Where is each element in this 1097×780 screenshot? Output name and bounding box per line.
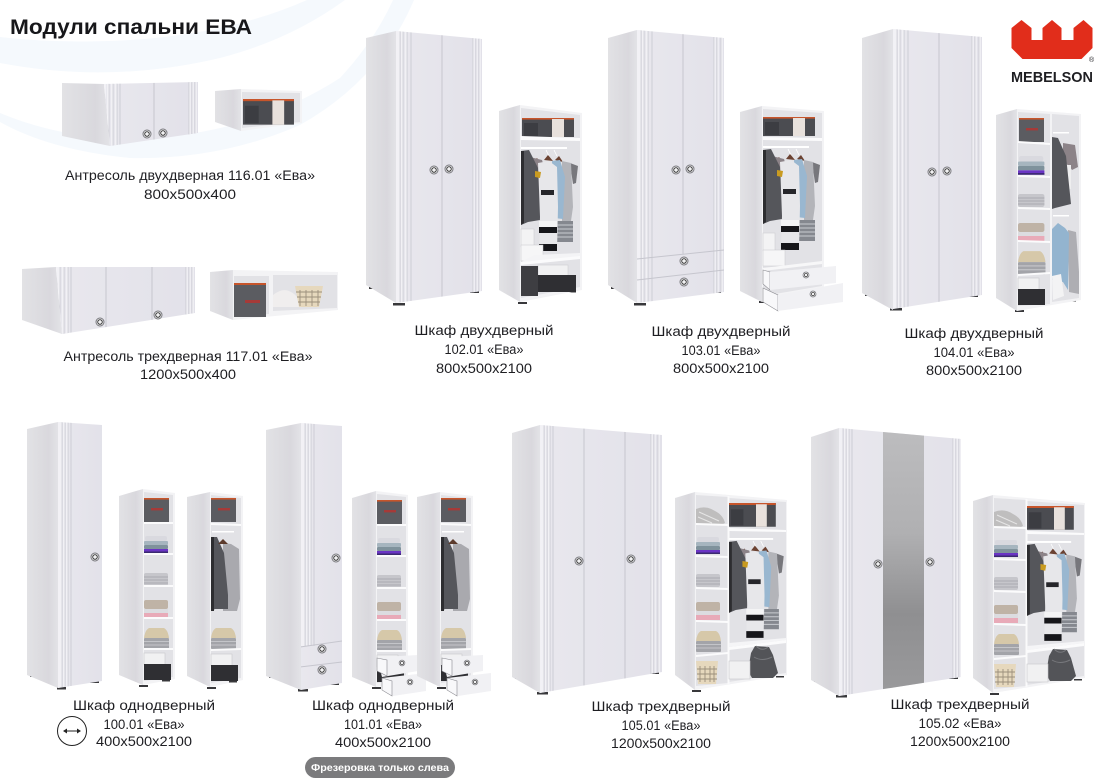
caption 105.02: 105.02 «Ева» xyxy=(918,716,1002,731)
caption 103.01: Шкаф двухдверный xyxy=(652,324,790,339)
closed wardrobe 103.01 xyxy=(608,30,724,306)
caption 105.01: Шкаф трехдверный xyxy=(592,699,730,714)
caption 101.01: 101.01 «Ева» xyxy=(344,717,422,732)
panel: шкаф 103.01 xyxy=(608,30,843,373)
caption 116.01: Антресоль двухдверная 116.01 «Ева» xyxy=(65,168,315,183)
caption 101.01: Шкаф однодверный xyxy=(312,698,454,713)
panel: шкаф 100.01 xyxy=(27,422,243,746)
panel: шкаф 101.01 xyxy=(266,423,491,778)
open wardrobe 101.01 with rail xyxy=(417,492,491,696)
caption 104.01: 104.01 «Ева» xyxy=(934,345,1014,360)
closed mezzanine 116.01 xyxy=(62,82,198,146)
caption 104.01: 800x500x2100 xyxy=(926,363,1022,378)
open wardrobe 102.01 xyxy=(499,105,582,304)
caption 100.01: 400x500x2100 xyxy=(96,734,192,749)
caption 116.01 xyxy=(65,168,315,202)
icon: castle crown xyxy=(1012,20,1092,59)
open wardrobe 105.01 xyxy=(675,492,787,692)
caption 100.01 xyxy=(73,698,215,749)
caption 102.01 xyxy=(414,323,554,376)
open wardrobe 100.01 with rail xyxy=(187,492,243,689)
caption 100.01: Шкаф однодверный xyxy=(73,698,215,713)
caption 104.01 xyxy=(904,326,1044,378)
closed mezzanine 117.01 xyxy=(22,267,195,334)
title: Модули спальни ЕВА xyxy=(10,15,252,39)
panel: шкаф 105.02 xyxy=(811,428,1085,746)
closed wardrobe 105.02 with mirror xyxy=(811,428,961,698)
caption 102.01: Шкаф двухдверный xyxy=(414,323,554,338)
caption 105.01 xyxy=(592,699,730,751)
background arcs xyxy=(0,0,414,158)
caption 105.02: Шкаф трехдверный xyxy=(890,697,1030,712)
caption 117.01: 1200x500x400 xyxy=(140,367,236,382)
badge: milling note: Фрезеровка только слева xyxy=(311,763,449,774)
panel: шкаф 102.01 xyxy=(366,31,582,373)
closed wardrobe 100.01 xyxy=(27,422,102,690)
open wardrobe 100.01 with shelves xyxy=(119,489,175,687)
closed wardrobe 102.01 xyxy=(366,31,482,306)
caption 103.01 xyxy=(652,324,790,376)
logo: MEBELSON xyxy=(1011,20,1095,86)
registered mark: ® xyxy=(1089,56,1095,64)
caption 101.01: 400x500x2100 xyxy=(335,735,431,750)
caption 100.01: 100.01 «Ева» xyxy=(104,717,184,732)
open wardrobe 104.01 xyxy=(996,109,1081,312)
badge: milling note xyxy=(305,757,455,778)
panel: шкаф 105.01 xyxy=(512,425,787,748)
open mezzanine 116.01 xyxy=(215,89,302,131)
closed wardrobe 105.01 xyxy=(512,425,662,694)
caption 102.01: 102.01 «Ева» xyxy=(444,342,524,357)
open wardrobe 105.02 xyxy=(973,495,1085,695)
caption 105.02: 1200x500x2100 xyxy=(910,734,1010,749)
caption 116.01: 800x500x400 xyxy=(144,187,236,202)
closed wardrobe 101.01 xyxy=(266,423,342,692)
caption 101.01 xyxy=(312,698,454,750)
caption 117.01 xyxy=(64,349,312,382)
caption 102.01: 800x500x2100 xyxy=(436,361,532,376)
caption 105.01: 1200x500x2100 xyxy=(611,736,711,751)
open wardrobe 103.01 with drawers xyxy=(740,106,843,311)
closed wardrobe 104.01 xyxy=(862,29,982,310)
panel: антресоль 116.01 xyxy=(62,82,314,199)
caption 103.01: 103.01 «Ева» xyxy=(682,343,760,358)
open wardrobe 101.01 with shelves xyxy=(352,491,426,696)
caption 117.01: Антресоль трехдверная 117.01 «Ева» xyxy=(64,349,312,364)
caption 103.01: 800x500x2100 xyxy=(673,361,769,376)
brand name: MEBELSON xyxy=(1011,69,1093,86)
open mezzanine 117.01 xyxy=(210,270,338,320)
caption 105.01: 105.01 «Ева» xyxy=(622,718,700,733)
caption 105.02 xyxy=(890,697,1030,749)
icon: double-headed arrow in circle xyxy=(58,716,86,746)
panel: антресоль 117.01 xyxy=(22,267,338,379)
caption 104.01: Шкаф двухдверный xyxy=(904,326,1044,341)
panel: шкаф 104.01 xyxy=(862,29,1081,375)
